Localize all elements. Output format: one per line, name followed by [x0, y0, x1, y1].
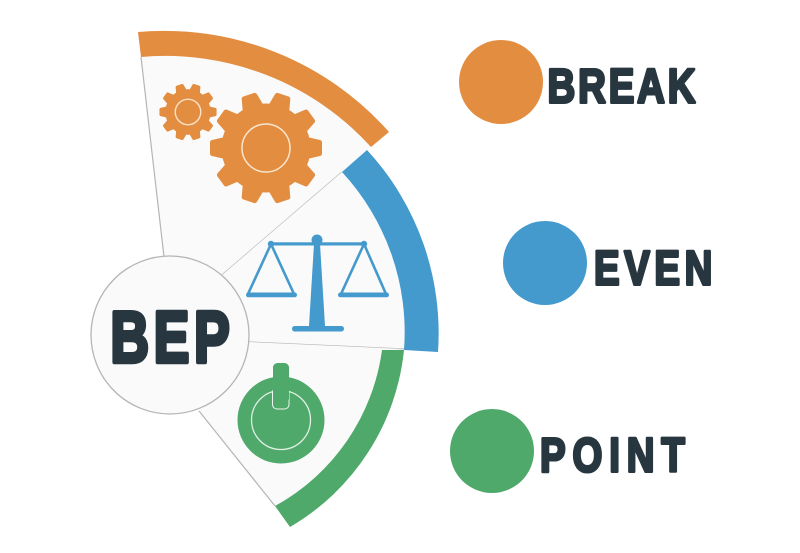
center badge: BEP: BEP — [110, 298, 230, 378]
icon: small gear — [159, 83, 217, 141]
arc: green — [275, 350, 404, 527]
center badge: BEP — [91, 256, 249, 414]
icon: power button — [238, 363, 324, 464]
icon: balance scale — [246, 234, 389, 332]
panel: break wedge — [138, 31, 389, 275]
panel: point wedge — [199, 342, 404, 527]
arc: orange — [138, 31, 389, 147]
panel: even wedge — [222, 150, 439, 352]
legend: break: BREAK — [548, 61, 696, 114]
legend: point: POINT — [540, 430, 685, 483]
legend: even: EVEN — [594, 243, 712, 296]
legend: even — [503, 221, 712, 305]
legend: point — [450, 409, 685, 493]
arc: blue — [342, 150, 439, 352]
legend: break — [459, 40, 696, 124]
icon: large gear — [210, 91, 322, 205]
